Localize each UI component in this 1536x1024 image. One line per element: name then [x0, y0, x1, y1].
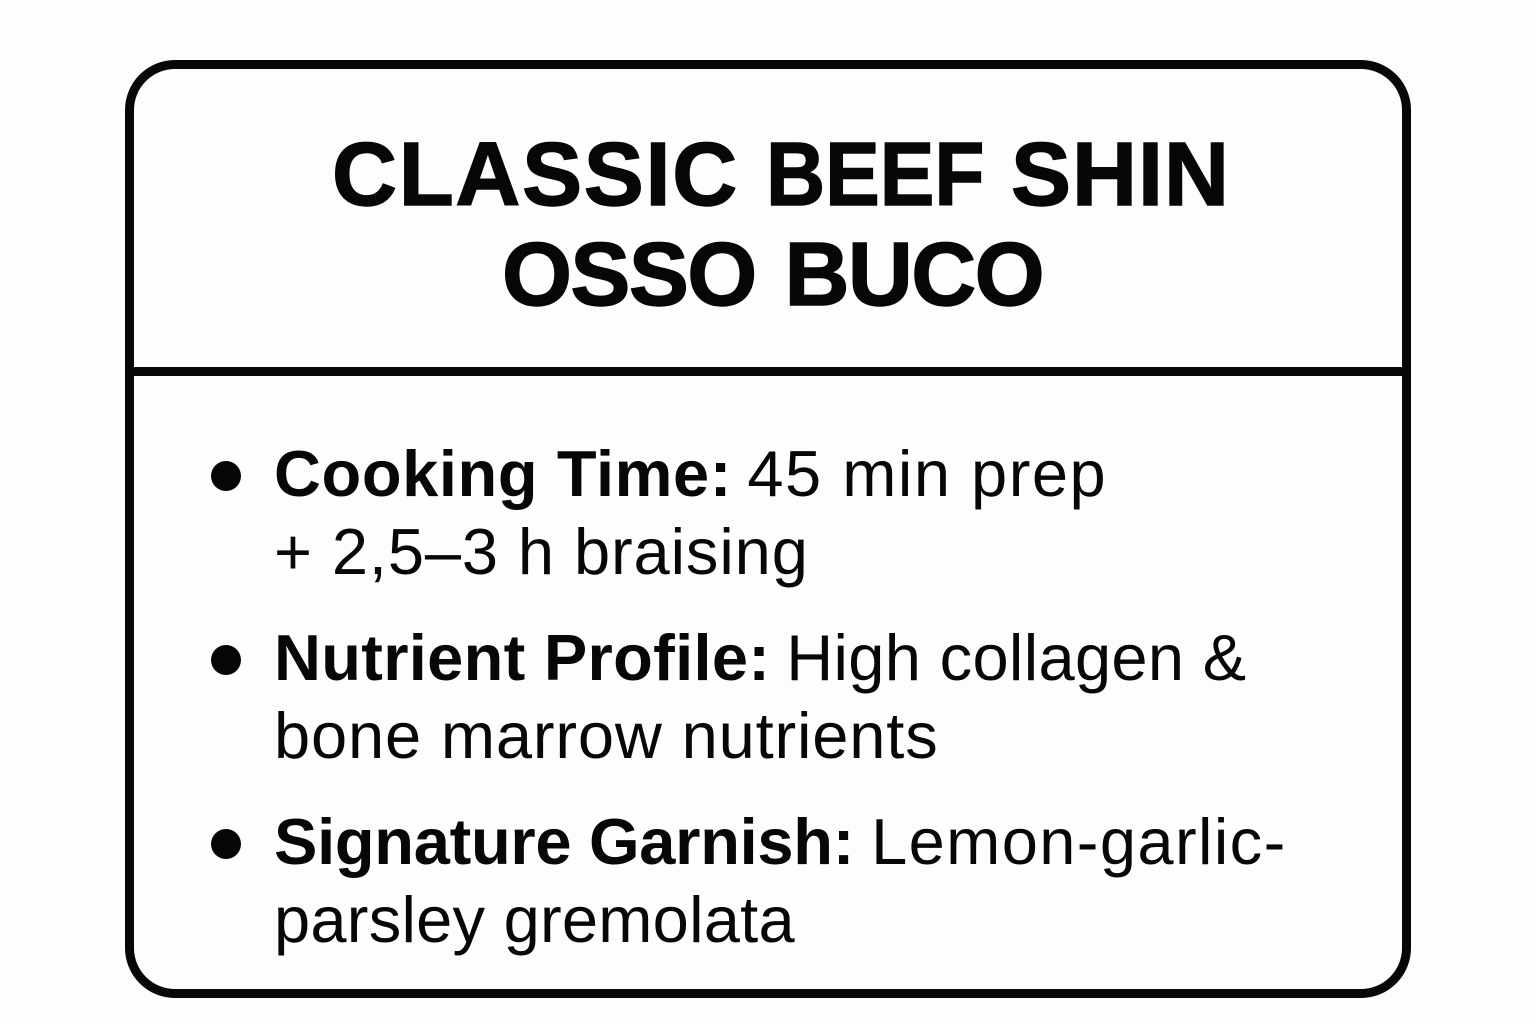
divider under title [130, 367, 1406, 376]
title: OSSO [502, 225, 756, 325]
text: cooking time [274, 437, 1107, 588]
text: nutrient profile [274, 621, 1246, 772]
title: BUCO [784, 225, 1043, 325]
text: cooking time: 45 min prep [747, 437, 1107, 510]
text: signature garnish: Lemon-garlic- [871, 805, 1287, 878]
text: signature garnish: Signature Garnish: [274, 805, 854, 878]
title: CLASSIC [332, 125, 739, 225]
text: cooking time: Cooking Time: [274, 437, 732, 510]
icon: bullet cooking time [211, 461, 241, 491]
icon: bullet signature garnish [211, 829, 241, 859]
text: nutrient profile: High collagen & [786, 621, 1246, 694]
text: signature garnish: parsley gremolata [274, 883, 795, 956]
text: nutrient profile: bone marrow nutrients [274, 699, 939, 772]
title: BEEF [766, 125, 984, 225]
text: nutrient profile: Nutrient Profile: [274, 621, 770, 694]
text: signature garnish [274, 805, 1287, 956]
title: SHIN [1011, 125, 1230, 225]
text: cooking time: + 2,5–3 h braising [274, 515, 809, 588]
title [332, 125, 1230, 325]
icon: bullet nutrient profile [211, 645, 241, 675]
panel: recipe card [125, 60, 1411, 998]
